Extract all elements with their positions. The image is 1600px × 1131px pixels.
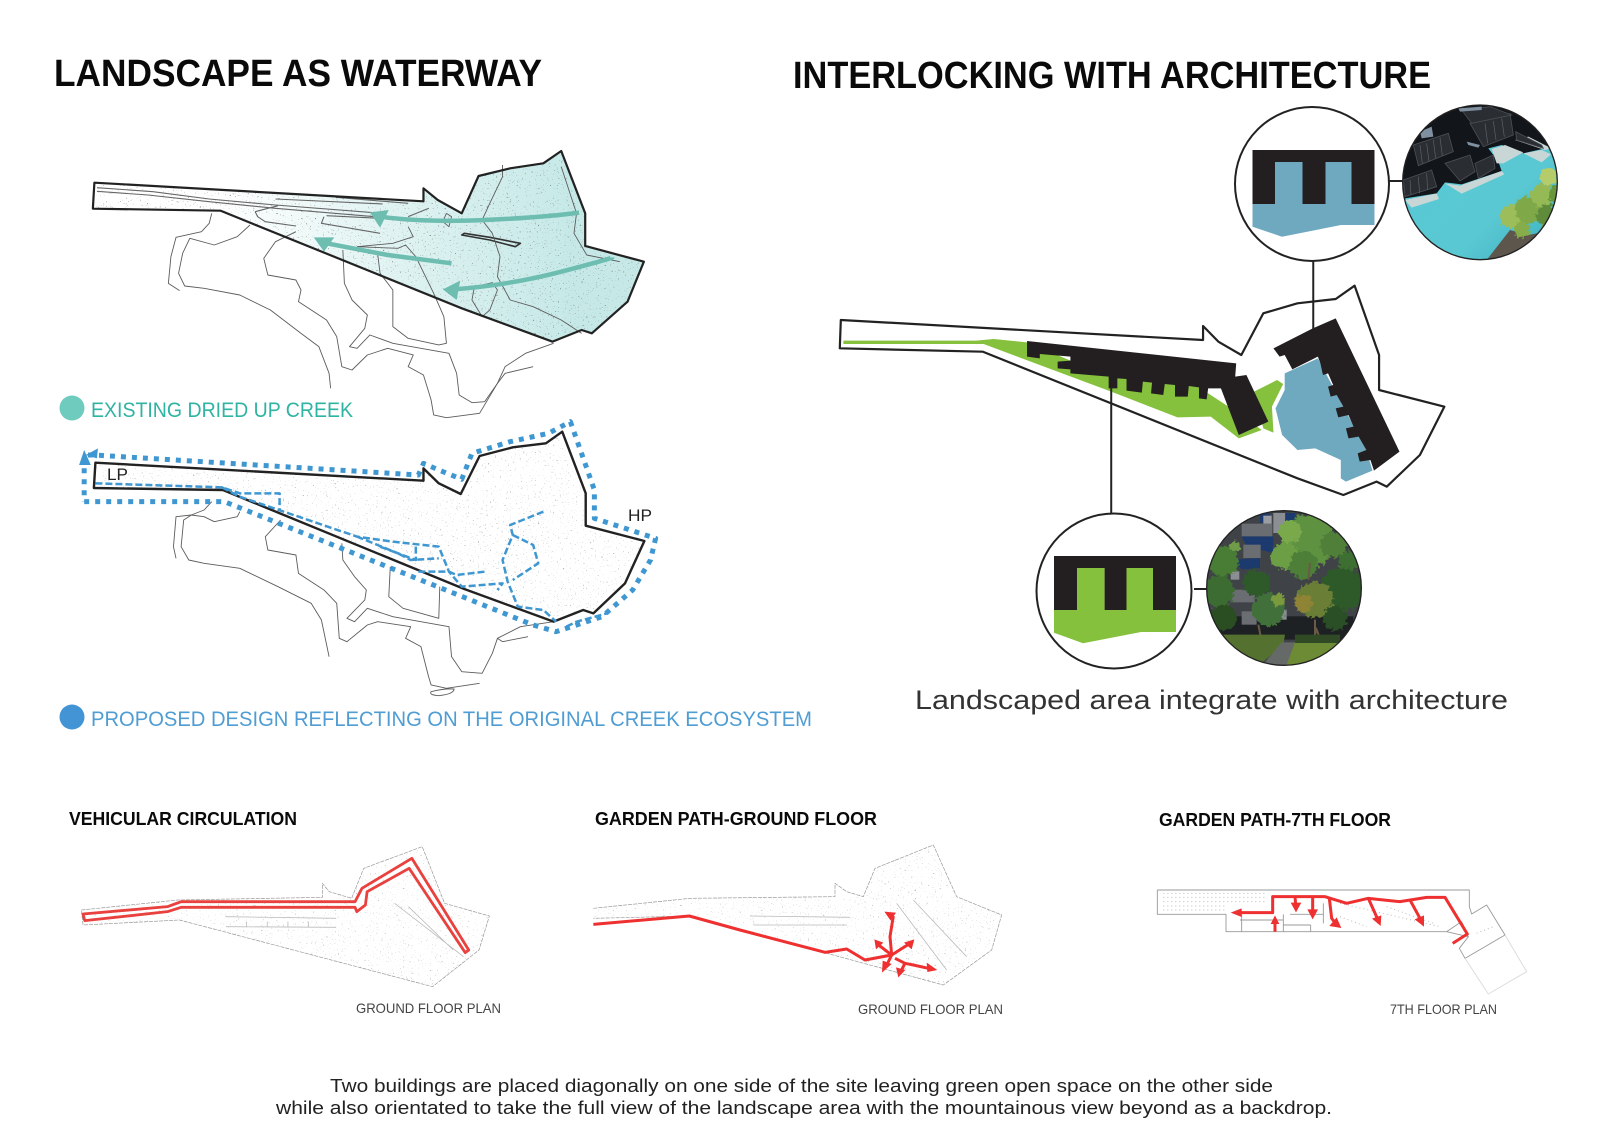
heading: GARDEN PATH-7TH FLOOR bbox=[1159, 810, 1391, 830]
label HP: HP bbox=[628, 506, 652, 525]
water plan block bbox=[1252, 162, 1374, 237]
green landscape area bbox=[843, 339, 1262, 438]
red branch arrows bbox=[874, 912, 937, 977]
photo rim bbox=[1403, 105, 1557, 260]
blue dashed inner creek network bbox=[95, 483, 607, 627]
legend: proposed design bbox=[60, 704, 812, 731]
site outline bbox=[840, 286, 1444, 495]
plan label: GROUND FLOOR PLAN bbox=[858, 1001, 1003, 1017]
ground planting bbox=[1220, 635, 1285, 663]
legend: existing dried up creek bbox=[60, 396, 353, 422]
photo: pool courtyard bbox=[1402, 104, 1558, 260]
circle outline bbox=[1235, 107, 1389, 261]
plan detail bbox=[1163, 893, 1493, 933]
blue water area bbox=[1276, 358, 1372, 482]
red arrows bbox=[1231, 897, 1424, 932]
black building west bbox=[1027, 341, 1268, 435]
site plan: proposed creek design bbox=[79, 422, 656, 696]
black building east bbox=[1273, 318, 1399, 471]
site fill with teal gradient bbox=[93, 151, 644, 342]
teal flow arrow 2 bbox=[314, 237, 452, 263]
interior road lines bbox=[97, 188, 429, 233]
site boundary bbox=[94, 432, 644, 622]
panel: vehicular circulation bbox=[69, 809, 501, 1016]
photo: garden building bbox=[1206, 510, 1362, 666]
building plan block bbox=[1252, 150, 1374, 204]
title: landscape as waterway: LANDSCAPE AS WATERWAY bbox=[54, 53, 542, 95]
label LP: LP bbox=[107, 465, 128, 484]
connector to top circle bbox=[1312, 262, 1314, 330]
stone roof corner bbox=[1488, 230, 1538, 258]
site stipple texture bbox=[90, 148, 650, 346]
balconies bbox=[1231, 513, 1287, 625]
red road outline bbox=[83, 858, 469, 953]
plan label: 7TH FLOOR PLAN bbox=[1390, 1001, 1497, 1017]
connector to lower circle bbox=[1110, 388, 1112, 513]
blue dotted outer flow line bbox=[84, 422, 656, 632]
plan and path bbox=[593, 845, 1002, 985]
dark building mass bbox=[1403, 106, 1548, 198]
red garden path bbox=[593, 916, 892, 960]
concrete decks bbox=[1405, 137, 1552, 208]
panel: garden path ground floor bbox=[590, 809, 1005, 1017]
plan outline bbox=[1157, 890, 1505, 958]
circle outline bbox=[1036, 514, 1192, 668]
title: interlocking with architecture: INTERLOCKING WITH ARCHITECTURE bbox=[793, 55, 1431, 97]
legend dot teal bbox=[60, 396, 84, 420]
pool water bbox=[1405, 145, 1557, 259]
plan detail bbox=[226, 903, 464, 957]
site plan: existing dried up creek bbox=[90, 148, 650, 418]
tree foliage bbox=[1498, 168, 1557, 239]
red main path bbox=[1237, 897, 1467, 943]
green plan block bbox=[1054, 568, 1176, 643]
blue flow arrowheads bbox=[79, 448, 98, 465]
trees bbox=[1202, 515, 1364, 631]
plan and road bbox=[81, 847, 489, 987]
legend dot blue bbox=[60, 704, 84, 730]
tree trunks bbox=[1257, 563, 1320, 635]
plan linework bbox=[93, 151, 644, 418]
teal flow arrow 3 bbox=[443, 257, 612, 300]
connector line top bbox=[1389, 180, 1404, 182]
blue balcony soffits bbox=[1233, 513, 1295, 570]
line one: Two buildings are placed diagonally on one side of the site leaving green open space on the other side bbox=[330, 1076, 1273, 1096]
photo rim bbox=[1207, 511, 1361, 665]
plan detail bbox=[750, 900, 967, 970]
line two: while also orientated to take the full view of the landscape area with the mountainous view beyond as a backdrop. bbox=[275, 1098, 1332, 1118]
stream lines bbox=[168, 165, 620, 418]
plan linework bbox=[79, 422, 656, 696]
teal flow arrow 1 bbox=[370, 210, 579, 228]
plan outline bbox=[593, 845, 1002, 985]
building background bbox=[1208, 511, 1360, 662]
lower dark facade bbox=[1220, 616, 1353, 640]
window reflections bbox=[1420, 107, 1482, 148]
connector line bottom bbox=[1194, 588, 1208, 590]
railings bbox=[1410, 118, 1504, 195]
site boundary bbox=[93, 151, 644, 342]
detail circle: water courtyard bbox=[1235, 107, 1389, 261]
heading: VEHICULAR CIRCULATION bbox=[69, 809, 297, 829]
architecture site diagram bbox=[840, 262, 1444, 513]
garden path bbox=[1265, 642, 1295, 665]
plan stipple texture bbox=[80, 845, 495, 990]
plan label: GROUND FLOOR PLAN bbox=[356, 1000, 501, 1016]
stream lines bbox=[173, 502, 554, 696]
detail circle: green courtyard bbox=[1036, 514, 1192, 668]
green landscape wedge bbox=[1254, 380, 1283, 433]
caption: landscaped area: Landscaped area integrate with architecture bbox=[915, 685, 1508, 715]
plan outline bbox=[81, 847, 489, 987]
building plan block bbox=[1054, 556, 1176, 610]
site stipple texture bbox=[95, 438, 640, 617]
building frames bbox=[1403, 107, 1543, 197]
legend text blue: PROPOSED DESIGN REFLECTING ON THE ORIGINAL CREEK ECOSYSTEM bbox=[91, 708, 812, 731]
lower faint outline bbox=[1465, 935, 1527, 994]
panel: garden path 7th floor bbox=[1157, 810, 1527, 1017]
bottom note bbox=[275, 1076, 1332, 1118]
legend text teal: EXISTING DRIED UP CREEK bbox=[91, 399, 353, 422]
plan stipple texture bbox=[590, 845, 1005, 990]
plan and path bbox=[1157, 890, 1527, 994]
central loop bbox=[462, 233, 520, 247]
heading: GARDEN PATH-GROUND FLOOR bbox=[595, 809, 877, 829]
